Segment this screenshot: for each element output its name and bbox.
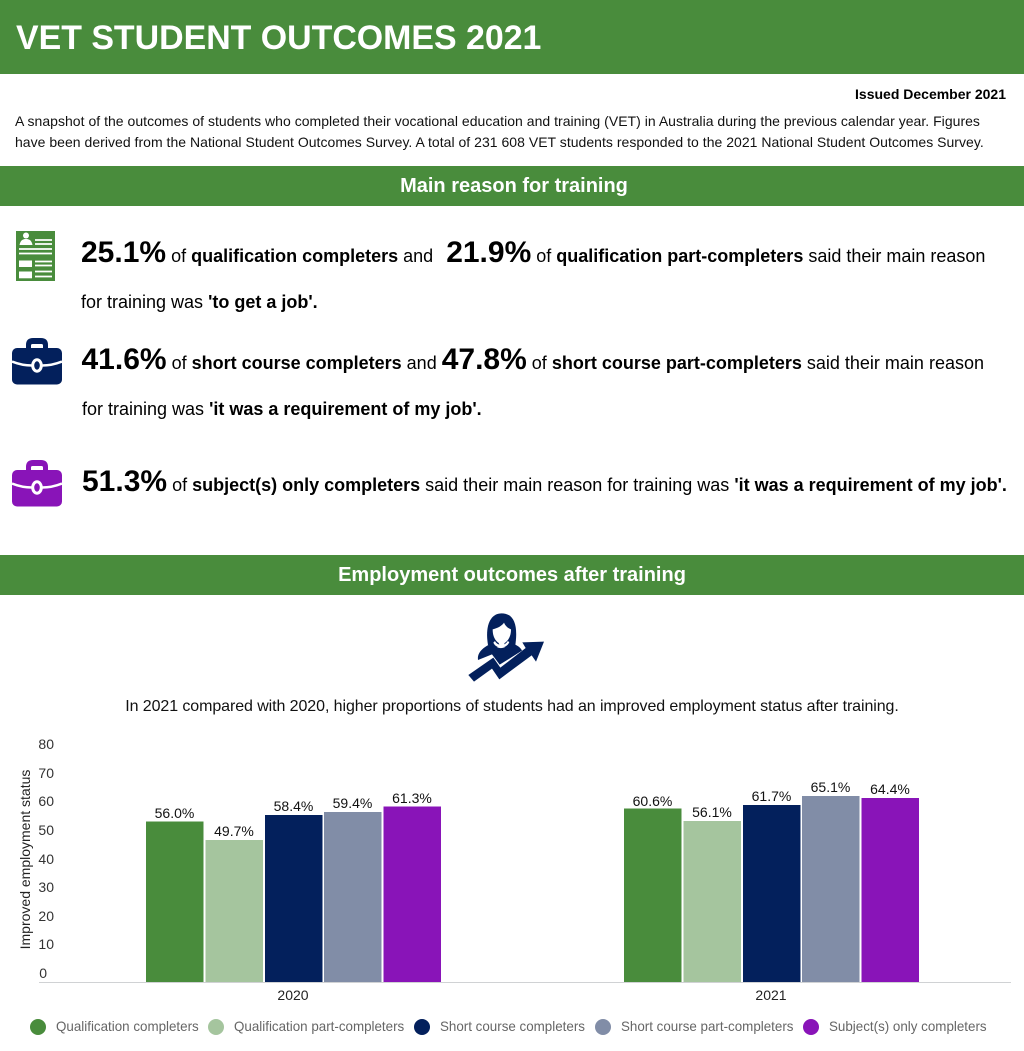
y axis title: Improved employment status [17, 770, 33, 949]
bar value labels 2021: 65.1% [811, 779, 850, 795]
bar value labels 2021: 56.1% [692, 804, 732, 820]
y axis labels: 70 [38, 765, 54, 781]
text: to get a job continuation: for training was 'to get a job'. [81, 292, 318, 312]
bar value labels 2021: 61.7% [752, 788, 791, 804]
legend: Qualification completers [56, 1019, 199, 1034]
bar value labels 2020: 49.7% [214, 823, 254, 839]
bar value labels 2021: 64.4% [870, 781, 910, 797]
icon: purple briefcase [12, 460, 62, 506]
y axis labels: 20 [38, 908, 54, 924]
y axis labels: 80 [38, 736, 54, 752]
legend: Short course completers [440, 1019, 585, 1034]
caption: improved employment status: In 2021 compared with 2020, higher proportions of students had an improved employment status after training. [125, 698, 899, 715]
bar value labels 2021 [633, 779, 910, 820]
intro text: A snapshot of the outcomes of students who completed their vocational education and training (VET) in Australia during the previous calendar year. Figures [15, 113, 980, 129]
text: requirement of job, short course: 41.6% of short course completers and 47.8% of short course part-completers said their main reason [82, 343, 984, 376]
section heading: main reason: Main reason for training [400, 175, 628, 197]
section heading: employment outcomes [0, 555, 1024, 595]
legend: Short course part-completers [621, 1019, 794, 1034]
bar value labels 2020: 56.0% [155, 805, 194, 821]
text: requirement continuation: for training was 'it was a requirement of my job'. [82, 399, 482, 419]
x axis labels [277, 987, 787, 1003]
y axis labels [38, 736, 54, 981]
icon: navy briefcase [12, 338, 62, 384]
section heading: employment outcomes: Employment outcomes after training [338, 564, 686, 586]
y axis labels: 30 [38, 879, 54, 895]
x axis labels: 2021 [755, 987, 787, 1003]
baseline [39, 982, 1011, 984]
intro text: have been derived from the National Student Outcomes Survey. A total of 231 608 VET students responded to the 2021 National Student Outcomes Survey. [15, 134, 984, 150]
legend [30, 1019, 987, 1035]
bar chart [17, 736, 1011, 1035]
text: subject only completers: 51.3% of subject(s) only completers said their main reason for training was 'it was a requirement of my job'. [82, 465, 1007, 498]
bar value labels 2020: 59.4% [333, 795, 372, 811]
y axis labels: 40 [38, 851, 54, 867]
bar value labels 2021: 60.6% [633, 793, 672, 809]
icon: woman with rising arrow [468, 613, 544, 682]
legend: Qualification part-completers [234, 1019, 405, 1034]
y axis labels: 60 [38, 793, 54, 809]
bars 2021 [624, 796, 919, 982]
y axis labels: 50 [38, 822, 54, 838]
intro text [15, 113, 984, 150]
x axis labels: 2020 [277, 987, 309, 1003]
bar value labels 2020: 58.4% [274, 798, 313, 814]
bars 2020 [146, 806, 441, 982]
text: to get a job: 25.1% of qualification completers and 21.9% of qualification part-completers said their main reason [81, 236, 985, 269]
issue date: Issued December 2021 [855, 86, 1006, 102]
title banner: VET STUDENT OUTCOMES 2021 [16, 19, 541, 57]
legend: Subject(s) only completers [829, 1019, 987, 1034]
section heading: main reason [0, 166, 1024, 206]
y axis labels: 10 [38, 936, 54, 952]
icon: resume document [16, 231, 55, 281]
title banner [0, 0, 1024, 74]
bar value labels 2020: 61.3% [392, 790, 432, 806]
bar value labels 2020 [155, 790, 432, 839]
y axis labels: 0 [39, 965, 47, 981]
